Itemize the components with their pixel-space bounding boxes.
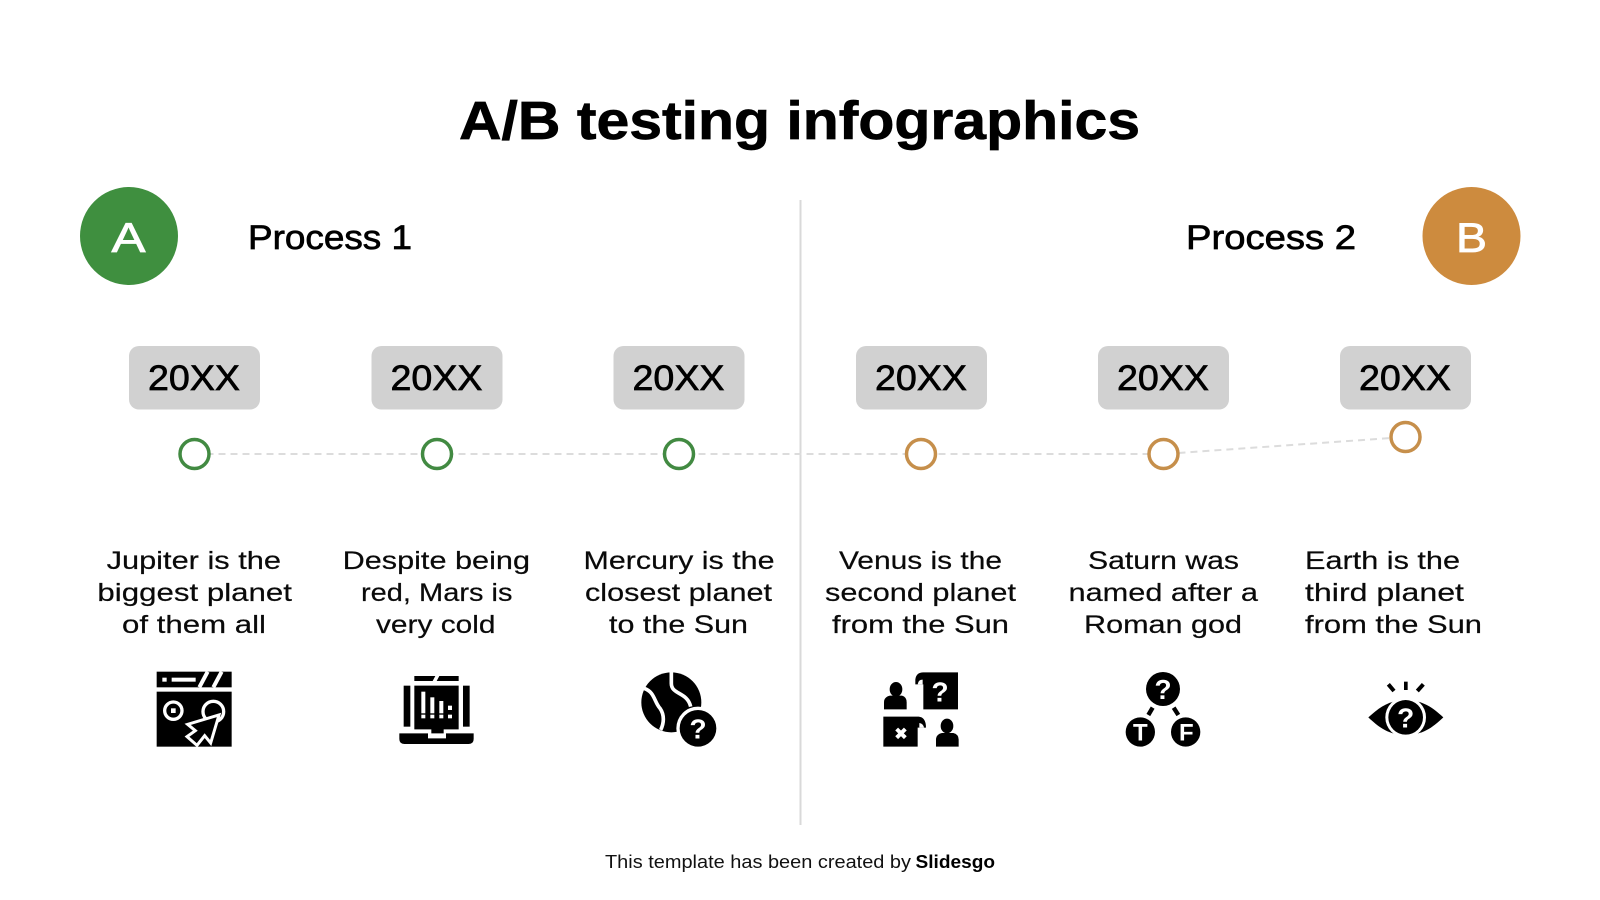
year label: 20XX	[632, 359, 724, 398]
icon: eye with question mark: ?	[1397, 702, 1414, 733]
year label	[372, 346, 502, 410]
icon: eye with question mark	[1368, 682, 1443, 738]
description: to the Sun	[609, 611, 748, 639]
footer credit: This template has been created by	[605, 852, 911, 872]
description: biggest planet	[97, 579, 292, 607]
description: from the Sun	[1305, 611, 1482, 639]
description: from the Sun	[832, 611, 1009, 639]
column: Venus	[825, 346, 1016, 747]
description: Mercury is the	[584, 547, 774, 575]
icon: planet with question mark	[641, 671, 720, 750]
description: second planet	[825, 579, 1016, 607]
column: Jupiter	[97, 346, 292, 747]
timeline node	[664, 440, 694, 468]
icon: true false decision tree: F	[1179, 719, 1194, 746]
description	[97, 547, 292, 639]
year label: 20XX	[1359, 359, 1451, 398]
description: named after a	[1068, 579, 1258, 607]
column: Earth	[1305, 346, 1482, 738]
badge: process B	[1422, 187, 1520, 285]
description: Jupiter is the	[107, 547, 281, 575]
icon: laptop with bar chart	[399, 676, 474, 744]
footer credit: Slidesgo	[916, 852, 995, 872]
description: very cold	[376, 611, 496, 639]
description: closest planet	[585, 579, 772, 607]
icon: true false decision tree	[1126, 672, 1200, 747]
timeline node	[422, 440, 452, 468]
description: Earth is the	[1305, 547, 1460, 575]
badge: process B: B	[1456, 214, 1487, 261]
year label: 20XX	[148, 359, 240, 398]
description: Saturn was	[1088, 547, 1239, 575]
icon: people asking questions: ?	[931, 677, 949, 708]
title: A/B testing infographics	[459, 91, 1140, 151]
badge: process A: A	[112, 214, 146, 261]
description	[1068, 547, 1258, 639]
icon: people asking questions	[883, 672, 959, 747]
description	[584, 547, 774, 639]
column: Mercury	[584, 346, 774, 750]
year label: 20XX	[390, 359, 482, 398]
description: of them all	[122, 611, 266, 639]
heading: Process 1: Process 1	[248, 219, 412, 257]
year label: 20XX	[1117, 359, 1209, 398]
description	[343, 547, 530, 639]
icon: planet with question mark: ?	[689, 713, 707, 744]
icon: browser window with cursor	[157, 672, 232, 747]
heading: Process 2: Process 2	[1186, 219, 1356, 257]
timeline node	[1391, 422, 1420, 452]
icon: true false decision tree: T	[1133, 719, 1148, 746]
year label	[129, 346, 260, 410]
timeline node	[906, 440, 936, 468]
column: Saturn	[1068, 346, 1258, 747]
year label	[1340, 346, 1471, 410]
description: Despite being	[343, 547, 530, 575]
description	[825, 547, 1016, 639]
description	[1305, 547, 1482, 639]
timeline node	[180, 440, 209, 468]
description: red, Mars is	[361, 579, 512, 607]
description: Roman god	[1084, 611, 1242, 639]
badge: process A	[80, 187, 178, 285]
year label	[614, 346, 744, 410]
column: Mars	[343, 346, 530, 744]
year label	[1098, 346, 1229, 410]
year label: 20XX	[875, 359, 967, 398]
year label	[856, 346, 987, 410]
timeline node	[1149, 440, 1178, 468]
timeline dashed connector	[194, 437, 1406, 454]
icon: true false decision tree: ?	[1154, 674, 1172, 705]
description: third planet	[1305, 579, 1464, 607]
description: Venus is the	[839, 547, 1002, 575]
